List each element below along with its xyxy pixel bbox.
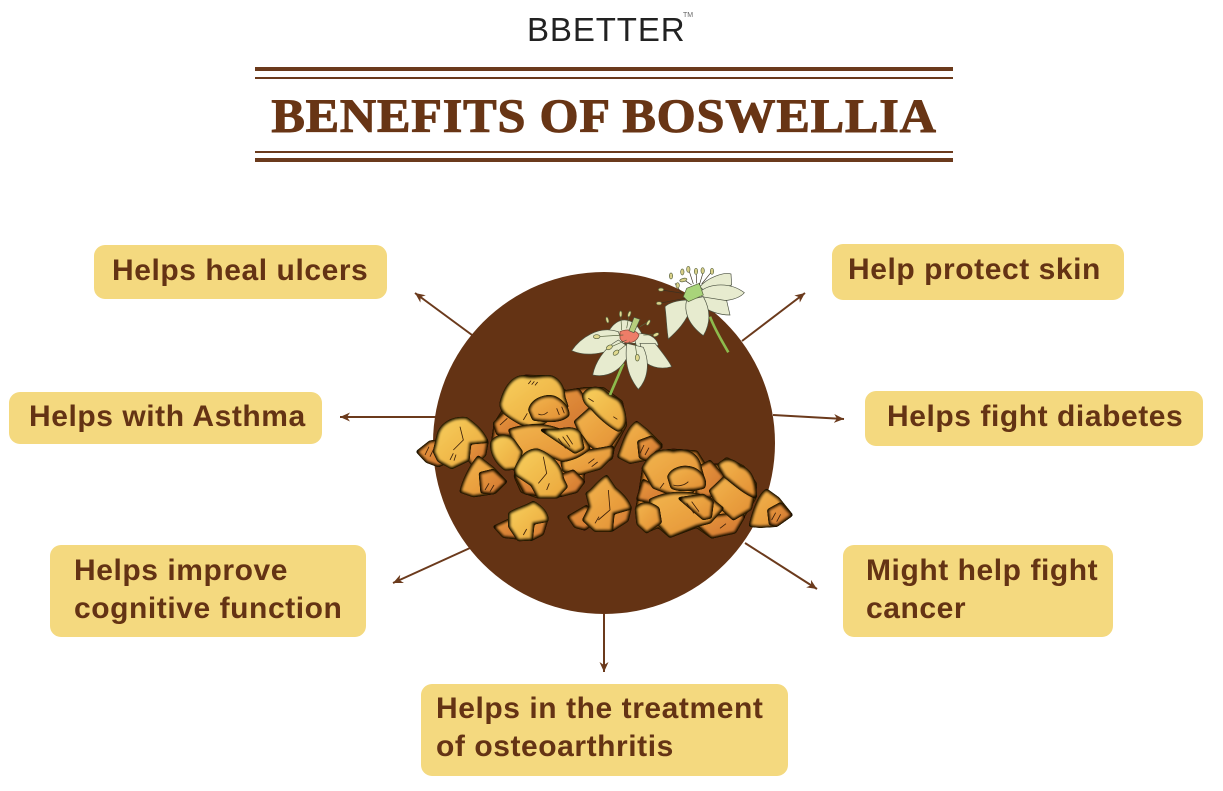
label: Helps improve cognitive function: cognitive function xyxy=(74,592,342,625)
resin shading hatch xyxy=(425,381,781,535)
resin cluster: large xyxy=(491,376,626,497)
label: Helps heal ulcers: Helps heal ulcers xyxy=(112,254,368,287)
label: Helps improve cognitive function xyxy=(50,545,366,637)
label: Help protect skin: Help protect skin xyxy=(848,253,1101,286)
resin chunk: bottom centre xyxy=(568,476,631,531)
label: Helps with Asthma: Helps with Asthma xyxy=(29,400,306,433)
resin chunk: far right xyxy=(750,490,792,527)
resin cluster: right xyxy=(636,450,756,537)
label: Helps in the treatment of osteoarthritis: of osteoarthritis xyxy=(436,730,674,763)
resin cluster: left chunk xyxy=(417,418,487,468)
brown circle xyxy=(433,272,775,614)
label: Helps heal ulcers xyxy=(94,245,387,299)
title: BENEFITS OF BOSWELLIA xyxy=(271,90,937,143)
arrow: left xyxy=(340,416,436,418)
label: Help protect skin xyxy=(832,244,1124,300)
label: Helps with Asthma xyxy=(9,392,322,444)
label: Helps fight diabetes: Helps fight diabetes xyxy=(887,400,1183,433)
label: Helps in the treatment of osteoarthritis xyxy=(421,684,788,776)
label: Might help fight cancer: Might help fight xyxy=(866,554,1098,587)
logo: BBETTER: TM xyxy=(683,12,693,19)
arrow: top right xyxy=(742,293,805,341)
logo: BBETTER: BBETTER xyxy=(527,11,686,48)
arrow: lower right xyxy=(745,543,817,589)
flower: centre xyxy=(572,311,672,395)
resin chunk: lower left xyxy=(461,457,506,496)
label: Helps improve cognitive function: Helps improve xyxy=(74,554,288,587)
resin chunk: upper right small xyxy=(618,422,662,463)
arrows xyxy=(340,293,844,672)
label: Might help fight cancer: cancer xyxy=(866,592,966,625)
arrow: top left xyxy=(415,293,472,335)
resin chunk: bottom yellow xyxy=(494,502,548,540)
label: Might help fight cancer xyxy=(843,545,1113,637)
arrow: lower left xyxy=(393,548,470,583)
label: Helps in the treatment of osteoarthritis: Helps in the treatment xyxy=(436,692,763,725)
title block with rules xyxy=(255,67,953,162)
arrow: bottom xyxy=(603,614,605,672)
resin nuggets xyxy=(417,376,792,540)
label: Helps fight diabetes xyxy=(865,391,1203,446)
flower: top right xyxy=(656,266,744,352)
arrow: right xyxy=(773,415,844,419)
